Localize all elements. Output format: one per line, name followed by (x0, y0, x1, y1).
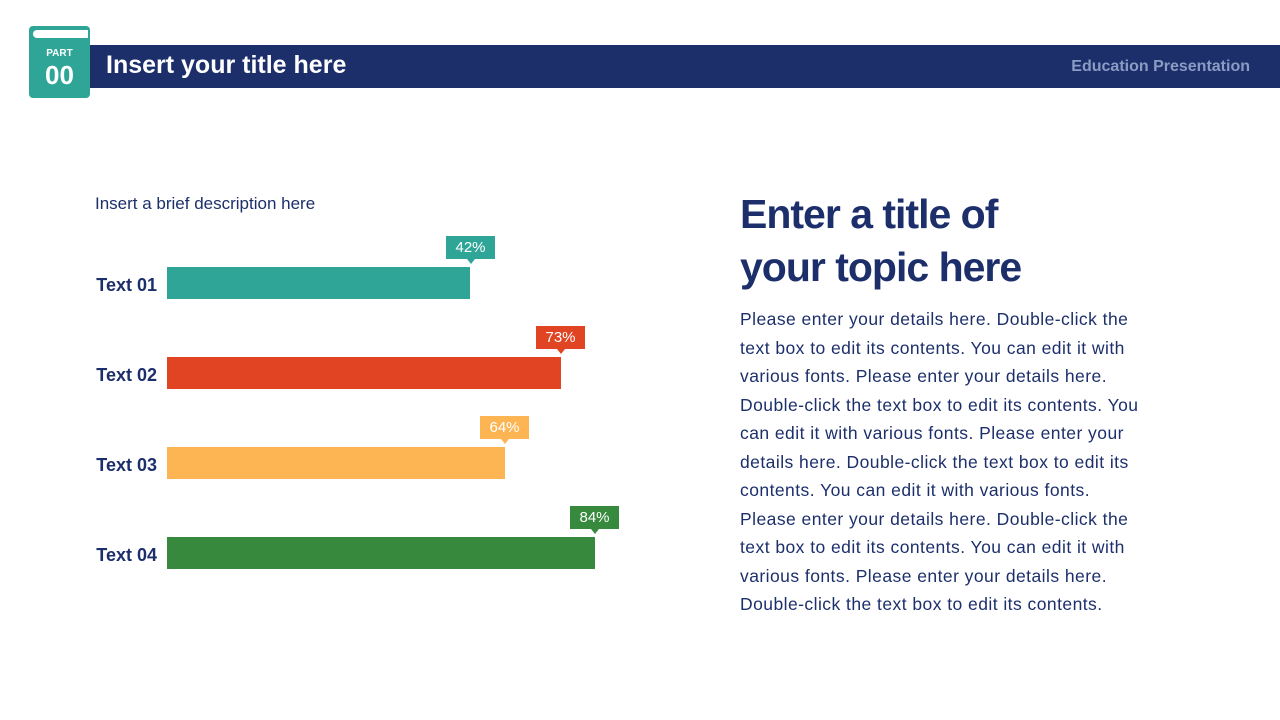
bar row 4: 84% (579, 509, 610, 526)
bar row 4: Text 04 (96, 545, 157, 565)
bar row 4 (96, 506, 619, 569)
topic title: your topic here (740, 244, 1021, 290)
body text: Double-click the text box to edit its contents. You (740, 394, 1138, 414)
body text: can edit it with various fonts. Please enter your (740, 423, 1124, 443)
bar row 2: 73% (545, 329, 576, 346)
header title: Insert your title here (106, 51, 346, 79)
badge: part 00 book (29, 26, 90, 98)
header bar (90, 45, 1280, 88)
bar row 1: Text 01 (96, 275, 157, 295)
bar row 2: Text 02 (96, 365, 157, 385)
bar row 3: Text 03 (96, 455, 157, 475)
body text: Double-click the text box to edit its contents. (740, 594, 1103, 614)
bar row 2 (96, 326, 585, 389)
badge: part 00 book: 00 (45, 60, 74, 90)
body text: contents. You can edit it with various fonts. (740, 480, 1090, 500)
chart description: Insert a brief description here (95, 194, 315, 213)
topic title: Enter a title of (740, 191, 997, 237)
bar row 3: 64% (489, 419, 520, 436)
body text: various fonts. Please enter your details here. (740, 366, 1107, 386)
bar chart (96, 236, 619, 569)
badge: part 00 book: PART (46, 48, 73, 59)
body text: Please enter your details here. Double-click the (740, 508, 1128, 528)
header subtitle: Education Presentation (1071, 58, 1250, 75)
body text (740, 309, 1138, 614)
body text: text box to edit its contents. You can edit it with (740, 537, 1125, 557)
body text: various fonts. Please enter your details here. (740, 566, 1107, 586)
topic title (740, 191, 1021, 290)
bar row 3 (96, 416, 529, 479)
bar row 1 (96, 236, 495, 299)
body text: text box to edit its contents. You can edit it with (740, 338, 1125, 358)
bar row 1: 42% (455, 239, 486, 256)
body text: details here. Double-click the text box to edit its (740, 452, 1129, 472)
body text: Please enter your details here. Double-click the (740, 309, 1128, 329)
